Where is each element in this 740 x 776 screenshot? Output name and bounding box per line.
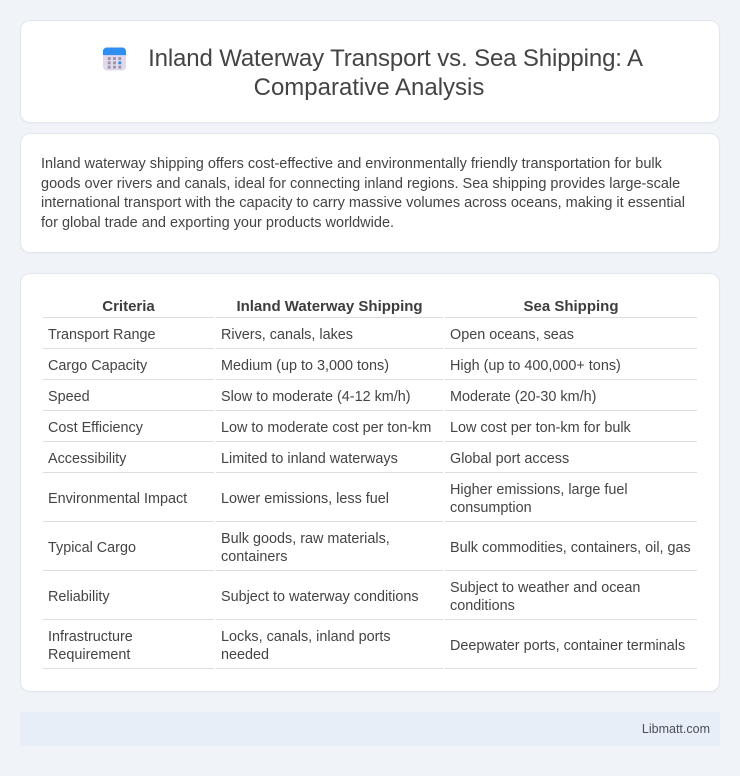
row: typical cargo: Typical Cargo — [48, 540, 136, 556]
row: speed: Slow to moderate (4-12 km/h) — [221, 389, 411, 405]
row: cargo capacity: High (up to 400,000+ tons) — [450, 358, 621, 374]
row: cost efficiency: Low cost per ton-km for bulk — [450, 420, 631, 436]
row: reliability: Reliability — [48, 589, 110, 605]
row: infrastructure requirement: needed — [221, 647, 269, 663]
row: typical cargo: containers — [221, 549, 287, 565]
row: environmental impact: Higher emissions, large fuel — [450, 482, 628, 498]
row: speed: Moderate (20-30 km/h) — [450, 389, 596, 405]
row: reliability — [48, 580, 640, 614]
row: reliability: conditions — [450, 598, 515, 614]
row: infrastructure requirement: Deepwater ports, container terminals — [450, 638, 685, 654]
title — [148, 45, 643, 101]
intro text — [41, 156, 685, 230]
row: speed: Speed — [48, 389, 90, 405]
panel: introduction — [20, 133, 720, 253]
panel: comparison table — [20, 273, 720, 692]
table header: Criteria — [102, 298, 155, 315]
comparison table — [43, 298, 697, 669]
table header: Sea Shipping — [523, 298, 618, 315]
row: cargo capacity — [48, 358, 621, 374]
row: accessibility — [48, 451, 569, 467]
row: typical cargo: Bulk goods, raw materials, — [221, 531, 390, 547]
row: infrastructure requirement: Requirement — [48, 647, 130, 663]
row: cost efficiency — [48, 420, 631, 436]
row: transport range: Rivers, canals, lakes — [221, 327, 353, 343]
table header: Inland Waterway Shipping — [236, 298, 423, 315]
row: environmental impact — [48, 482, 628, 516]
row: transport range — [48, 327, 574, 343]
row: environmental impact: Lower emissions, less fuel — [221, 491, 389, 507]
footer credit: Libmatt.com — [642, 722, 710, 736]
row: typical cargo: Bulk commodities, containers, oil, gas — [450, 540, 691, 556]
footer bar — [20, 712, 720, 746]
panel: title card — [20, 20, 720, 123]
row: cost efficiency: Cost Efficiency — [48, 420, 143, 436]
row: typical cargo — [48, 531, 691, 565]
intro text: for global trade and exporting your products worldwide. — [41, 214, 394, 230]
row: reliability: Subject to weather and ocean — [450, 580, 640, 596]
title: Comparative Analysis — [254, 74, 484, 101]
intro text: Inland waterway shipping offers cost-effective and environmentally friendly transportation for bulk — [41, 156, 662, 172]
intro text: goods over rivers and canals, ideal for connecting inland regions. Sea shipping provides large-scale — [41, 176, 680, 192]
row: accessibility: Global port access — [450, 451, 569, 467]
row: infrastructure requirement: Locks, canals, inland ports — [221, 629, 391, 645]
row: infrastructure requirement: Infrastructure — [48, 629, 133, 645]
row: accessibility: Accessibility — [48, 451, 126, 467]
row: transport range: Open oceans, seas — [450, 327, 574, 343]
table header — [102, 298, 618, 315]
row: infrastructure requirement — [48, 629, 685, 663]
row: transport range: Transport Range — [48, 327, 155, 343]
row: cargo capacity: Medium (up to 3,000 tons) — [221, 358, 389, 374]
row: environmental impact: Environmental Impact — [48, 491, 187, 507]
intro text: international transport with the capacity to carry massive volumes across oceans, making it essential — [41, 195, 685, 211]
title: Inland Waterway Transport vs. Sea Shipping: A — [148, 45, 643, 72]
row: speed — [48, 389, 596, 405]
row: cargo capacity: Cargo Capacity — [48, 358, 147, 374]
row: accessibility: Limited to inland waterways — [221, 451, 398, 467]
icon: calendar — [102, 48, 126, 70]
row: reliability: Subject to waterway conditions — [221, 589, 419, 605]
row: cost efficiency: Low to moderate cost per ton-km — [221, 420, 431, 436]
row: environmental impact: consumption — [450, 500, 532, 516]
